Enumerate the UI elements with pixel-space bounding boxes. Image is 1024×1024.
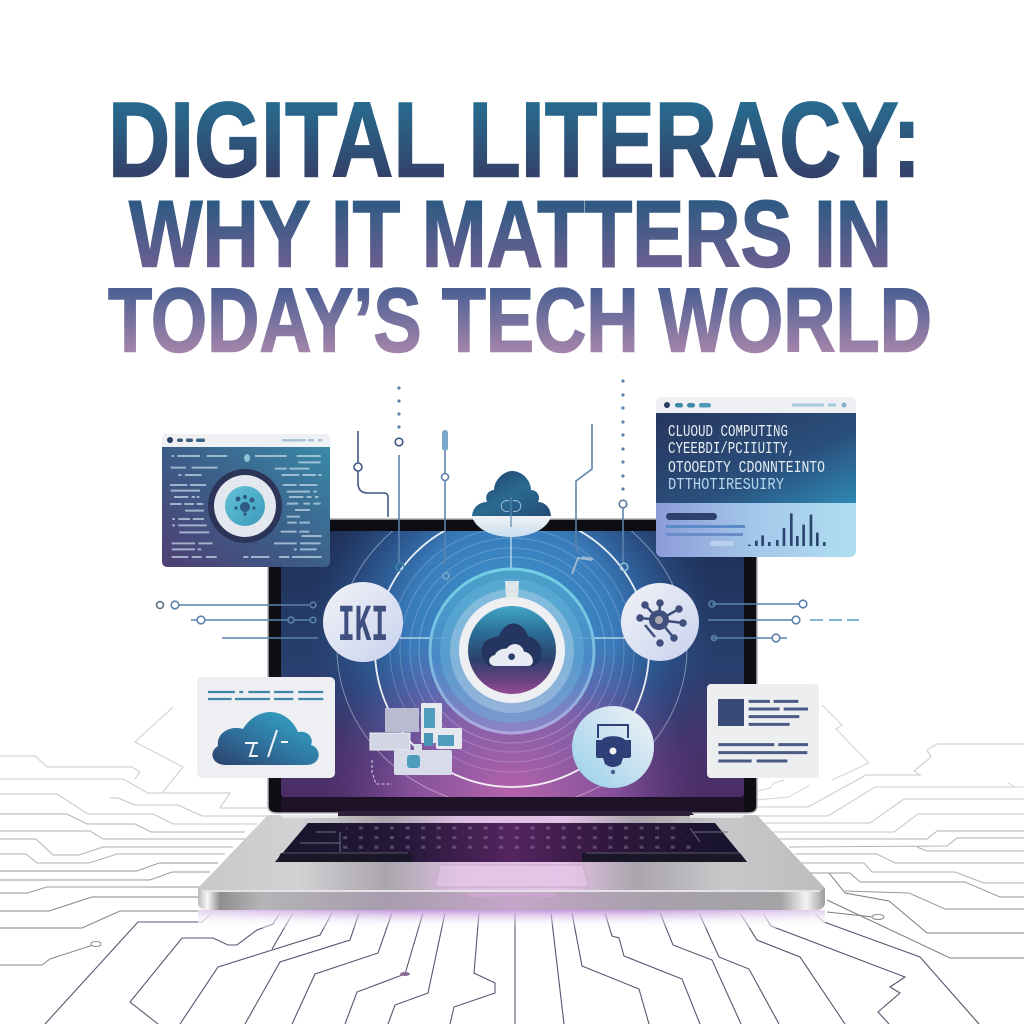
glow under laptop	[198, 910, 825, 928]
icon: webcam lens circle	[572, 706, 654, 788]
panel: right cloud computing window	[656, 397, 856, 557]
circuit traces: left	[0, 707, 270, 965]
screen	[281, 531, 744, 797]
window text: CLUOUD COMPUTING	[668, 423, 788, 442]
window buttons	[167, 437, 322, 443]
laptop lid	[268, 519, 757, 818]
keyboard	[275, 823, 747, 862]
card: cloud code	[197, 677, 335, 778]
orbit rings	[336, 531, 688, 797]
block diagram on screen	[370, 703, 462, 784]
trackpad	[435, 865, 589, 887]
connector lines right	[708, 600, 859, 642]
window text: OTOOEDTY CDONNTEINTO	[668, 459, 825, 478]
laptop	[198, 488, 825, 910]
icon: code cloud	[212, 712, 319, 765]
connector lines left	[156, 601, 318, 638]
icon: lens with network	[208, 469, 282, 543]
window text: CYEEBDI/PCIIUITY,	[668, 440, 795, 459]
card: document	[707, 684, 819, 778]
icon: cloud in hub	[482, 623, 542, 666]
title	[108, 80, 932, 372]
icon: KI circle	[323, 582, 403, 662]
window buttons	[664, 402, 846, 408]
bar chart	[749, 513, 824, 546]
icon: KI circle: IKI	[338, 597, 388, 656]
window text: DTTHOTIRESUIRY	[668, 476, 784, 495]
circuit traces: right	[757, 705, 1024, 958]
central cloud hub	[430, 569, 594, 733]
code lines	[170, 456, 322, 557]
cloud dish on lid	[472, 471, 551, 537]
icon: network virus circle	[621, 583, 699, 661]
circuit traces: bottom	[45, 913, 979, 1024]
laptop base	[198, 815, 825, 910]
window text	[668, 423, 825, 495]
text bars	[666, 513, 745, 546]
spokes	[400, 537, 625, 638]
connector lines top	[354, 379, 628, 579]
panel: left code window	[162, 434, 330, 567]
